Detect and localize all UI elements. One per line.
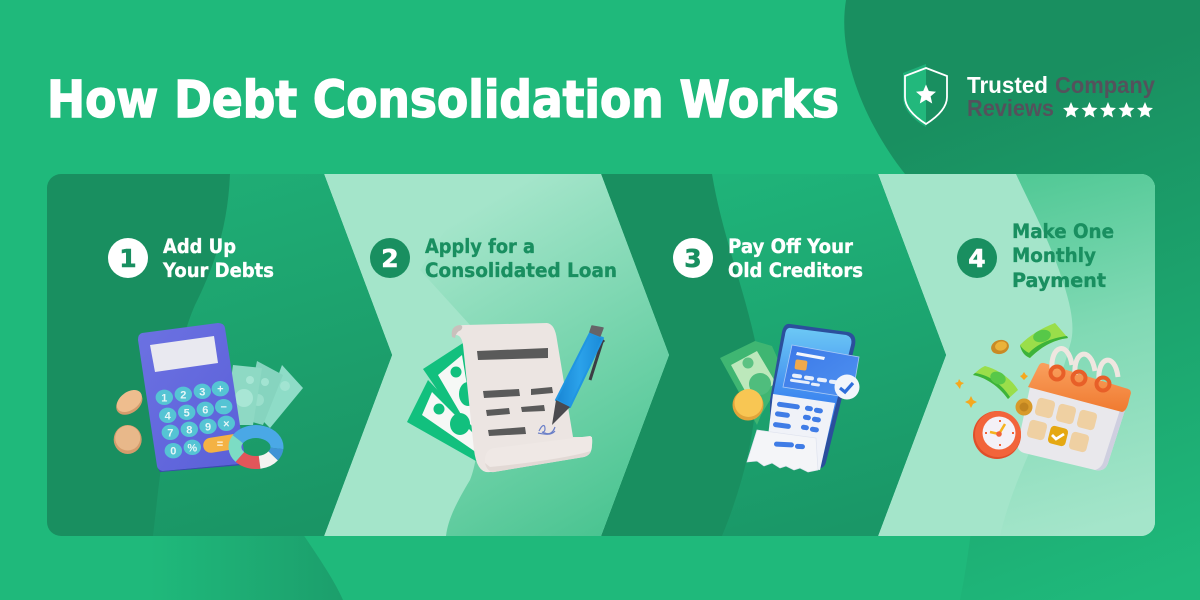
calculator screen [150, 336, 218, 372]
badge 2: 2 [381, 244, 399, 273]
panel 3 shaded area [712, 174, 946, 536]
step 3 label: Old Creditors [728, 259, 863, 282]
panel: step 3 [601, 174, 946, 536]
calculator body [138, 323, 245, 471]
key labels: 5 [184, 407, 190, 419]
date tiles [1026, 397, 1098, 453]
phone [770, 324, 855, 468]
green bills [407, 343, 490, 465]
step 1 label [162, 235, 274, 282]
calculator keys [156, 381, 235, 458]
panel 4 shaded area [1000, 174, 1155, 536]
step 4 label: Monthly [1012, 244, 1096, 267]
scroll curl [485, 436, 592, 472]
key labels: × [223, 418, 230, 430]
step 4 label: Payment [1012, 269, 1106, 292]
key labels: 6 [202, 404, 208, 416]
icon: calculator with bills, coins and donut chart [112, 323, 303, 472]
receipt [747, 394, 835, 472]
coins [112, 385, 147, 454]
badge 1: 1 [119, 244, 137, 273]
step 1 heading [108, 235, 274, 282]
key labels: 3 [199, 386, 205, 398]
panel 2 shaded area [420, 174, 680, 536]
gold coins [989, 338, 1032, 416]
teal bills [225, 361, 303, 428]
step 3 label [728, 235, 863, 282]
step 3 label: Pay Off Your [728, 235, 853, 258]
step 2 label [425, 235, 617, 282]
panel: steps band [47, 174, 1155, 536]
step 2 label: Apply for a [425, 235, 535, 258]
badge 1 [108, 238, 148, 278]
step 1 label: Add Up [163, 235, 236, 258]
key labels: 9 [205, 421, 211, 433]
key labels [161, 384, 230, 458]
step 4 label: Make One [1012, 220, 1114, 243]
coin [732, 389, 764, 420]
bottom left background blob [150, 500, 343, 600]
step 4 heading [957, 220, 1114, 292]
logo text: Company [1055, 72, 1155, 98]
step 1 label: Your Debts [162, 259, 274, 282]
panel: step 2 [324, 174, 680, 536]
icon: calendar with clock, bills, coins and sparkles [955, 323, 1131, 470]
panel 1 shaded area [153, 174, 400, 536]
bright green bills [973, 323, 1068, 399]
key labels: % [187, 442, 197, 454]
badge 2 [370, 238, 410, 278]
sparkles [955, 372, 1028, 408]
key labels: = [217, 438, 223, 450]
donut chart [235, 432, 277, 463]
rings [1050, 349, 1118, 390]
title: How Debt Consolidation Works [47, 71, 839, 130]
green banknotes [720, 341, 785, 425]
key labels: + [217, 384, 224, 396]
key labels: 4 [165, 410, 172, 422]
logo text [967, 72, 1155, 121]
top right background blob [844, 0, 1200, 600]
signature [538, 426, 555, 434]
logo: Trusted Company Reviews [903, 64, 1155, 127]
panel: step 4 [878, 174, 1155, 536]
rating stars [1063, 102, 1153, 118]
step 2 label: Consolidated Loan [425, 259, 617, 282]
calendar body [1018, 387, 1125, 470]
step 3 heading [673, 235, 863, 282]
pen [552, 326, 604, 425]
key labels: − [220, 402, 227, 414]
key labels: 0 [170, 446, 176, 458]
calendar top [1028, 363, 1131, 412]
check badge [834, 374, 860, 400]
key labels: 8 [186, 424, 192, 436]
key labels: 2 [180, 389, 186, 401]
paper scroll [452, 323, 592, 472]
credit card [783, 345, 859, 398]
step 2 heading [370, 235, 617, 282]
icon: shield [903, 64, 948, 127]
key labels: 1 [161, 392, 167, 404]
panel: step 1 [47, 174, 400, 536]
icon: loan document with bills and pen [407, 323, 604, 472]
step 4 label [1012, 220, 1114, 292]
badge 3: 3 [684, 244, 702, 273]
logo text: Reviews [967, 95, 1054, 121]
key labels: 7 [167, 427, 173, 439]
equals key [202, 433, 242, 454]
badge 4 [957, 238, 997, 278]
clock [973, 411, 1021, 459]
badge 4: 4 [968, 244, 986, 273]
logo text: Trusted [967, 72, 1048, 98]
icon: phone with card and receipt [720, 324, 860, 472]
badge 3 [673, 238, 713, 278]
document lines [477, 348, 553, 436]
